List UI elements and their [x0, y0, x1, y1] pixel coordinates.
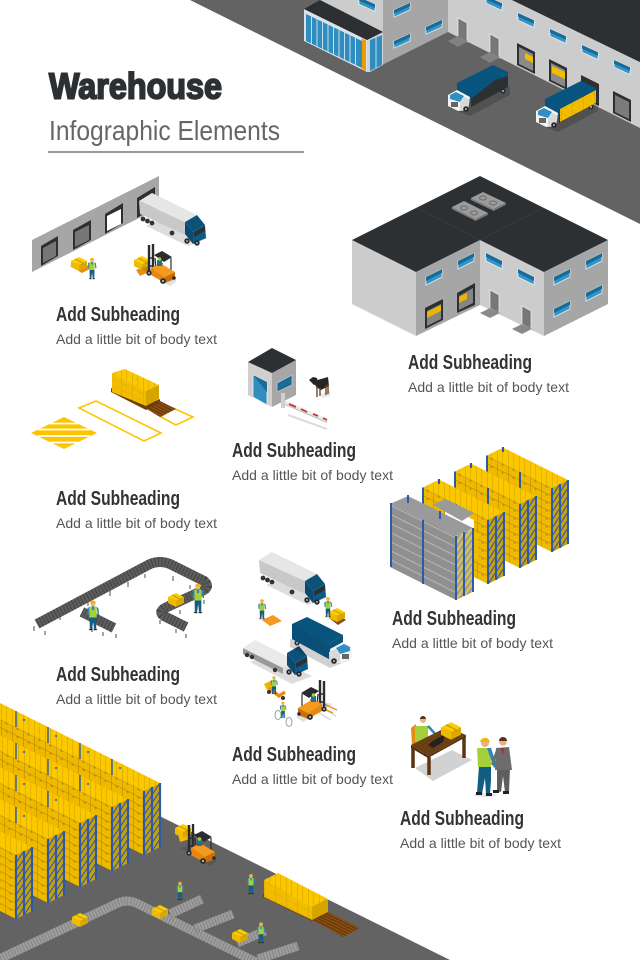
rack back [487, 447, 568, 552]
title: Warehouse [49, 66, 222, 106]
roof AC units [452, 192, 506, 221]
panel: floor markings and pallet [31, 369, 193, 449]
text: subheading 5 [392, 608, 553, 651]
side doors and steps [480, 290, 532, 334]
panel: gatehouse [248, 348, 330, 429]
text: subheading 3 [56, 488, 217, 531]
light wall with loading doors [448, 0, 640, 128]
text: subheading 7: Add a little bit of body text [232, 771, 393, 787]
floor boxes [72, 905, 248, 943]
text: subheading 2: Add a little bit of body text [408, 379, 569, 395]
worker [88, 258, 96, 280]
text: subheading 8: Add a little bit of body text [400, 835, 561, 851]
bottom warehouse floor scene [0, 623, 450, 960]
panel: conveyor [34, 562, 207, 638]
worker right [192, 584, 204, 614]
conveyor belts [37, 562, 207, 628]
box on pallet [329, 608, 346, 625]
empty rack front [391, 495, 473, 600]
rack second [455, 463, 536, 568]
outline zones [79, 401, 161, 441]
desk shadow [415, 750, 472, 781]
worker left [87, 601, 99, 631]
text: subheading 8 [400, 808, 561, 851]
text: subheading 5: Add Subheading [392, 608, 516, 630]
annex walls [320, 0, 448, 72]
windows [359, 0, 630, 74]
blue truck [290, 617, 352, 668]
ground: bottom left [0, 737, 450, 960]
text: subheading 3: Add a little bit of body text [56, 515, 217, 531]
subtitle: Infographic Elements [49, 115, 280, 146]
booth [248, 348, 296, 407]
text: subheading 1 [56, 304, 217, 347]
dark roof [512, 0, 640, 62]
text: subheading 6: Add a little bit of body text [56, 691, 217, 707]
white truck [259, 552, 328, 605]
panel: office desk and handshake [411, 716, 512, 797]
text: subheading 3: Add Subheading [56, 488, 180, 510]
striped zone [31, 417, 97, 449]
worker with hard hat [474, 738, 497, 797]
panel: vehicles [243, 552, 352, 726]
dock doors [41, 187, 155, 266]
empty pallet on floor [312, 912, 360, 937]
loading bays [517, 43, 631, 122]
seated clerk [411, 716, 437, 756]
forklift with box [134, 244, 177, 286]
windows [426, 253, 602, 317]
box on conveyor [168, 593, 184, 607]
pallet and boxes [70, 257, 92, 273]
box on desk [441, 722, 461, 740]
text: subheading 8: Add Subheading [400, 808, 524, 830]
panel: loading dock [32, 176, 208, 286]
guard dog [309, 377, 330, 398]
cart [262, 615, 282, 626]
loading doors [425, 283, 475, 329]
text: subheading 7: Add Subheading [232, 744, 356, 766]
top warehouse scene [190, 0, 640, 224]
small doors and steps [448, 18, 500, 63]
conveyor legs [34, 574, 204, 638]
truck: open box [448, 65, 510, 116]
empty pallet [145, 401, 176, 417]
panel: warehouse building [352, 176, 608, 336]
text: subheading 6 [56, 664, 217, 707]
scooter [264, 676, 285, 700]
text: subheading 4 [232, 440, 393, 483]
truck: yellow cargo [536, 81, 598, 132]
white truck [139, 193, 208, 246]
text: subheading 1: Add Subheading [56, 304, 180, 326]
stacked boxes on floor [263, 873, 328, 921]
orange forklift [296, 680, 337, 722]
box worker [324, 597, 332, 618]
title rule [48, 151, 304, 153]
floor conveyors [0, 899, 298, 960]
dock wall [32, 176, 159, 272]
text: subheading 6: Add Subheading [56, 664, 180, 686]
bicycle [275, 702, 292, 726]
text: subheading 5: Add a little bit of body text [392, 635, 553, 651]
text: subheading 1: Add a little bit of body text [56, 331, 217, 347]
rack third partial [423, 479, 504, 584]
desk [411, 727, 466, 775]
floor forklift [175, 824, 217, 866]
ground: top right [190, 0, 640, 224]
laptop [428, 734, 445, 748]
barrier [281, 393, 327, 429]
storage racks [0, 623, 160, 919]
cart worker [258, 599, 266, 620]
stacked boxes [111, 369, 160, 410]
flatbed truck [243, 640, 312, 684]
text: subheading 4: Add Subheading [232, 440, 356, 462]
floor workers [177, 874, 265, 944]
text: subheading 4: Add a little bit of body text [232, 467, 393, 483]
roof [352, 176, 608, 272]
businessman [491, 737, 512, 794]
text: subheading 2 [408, 352, 569, 395]
panel: racks [391, 447, 568, 600]
text: subheading 7 [232, 744, 393, 787]
glass entrance [304, 0, 383, 72]
text: subheading 2: Add Subheading [408, 352, 532, 374]
